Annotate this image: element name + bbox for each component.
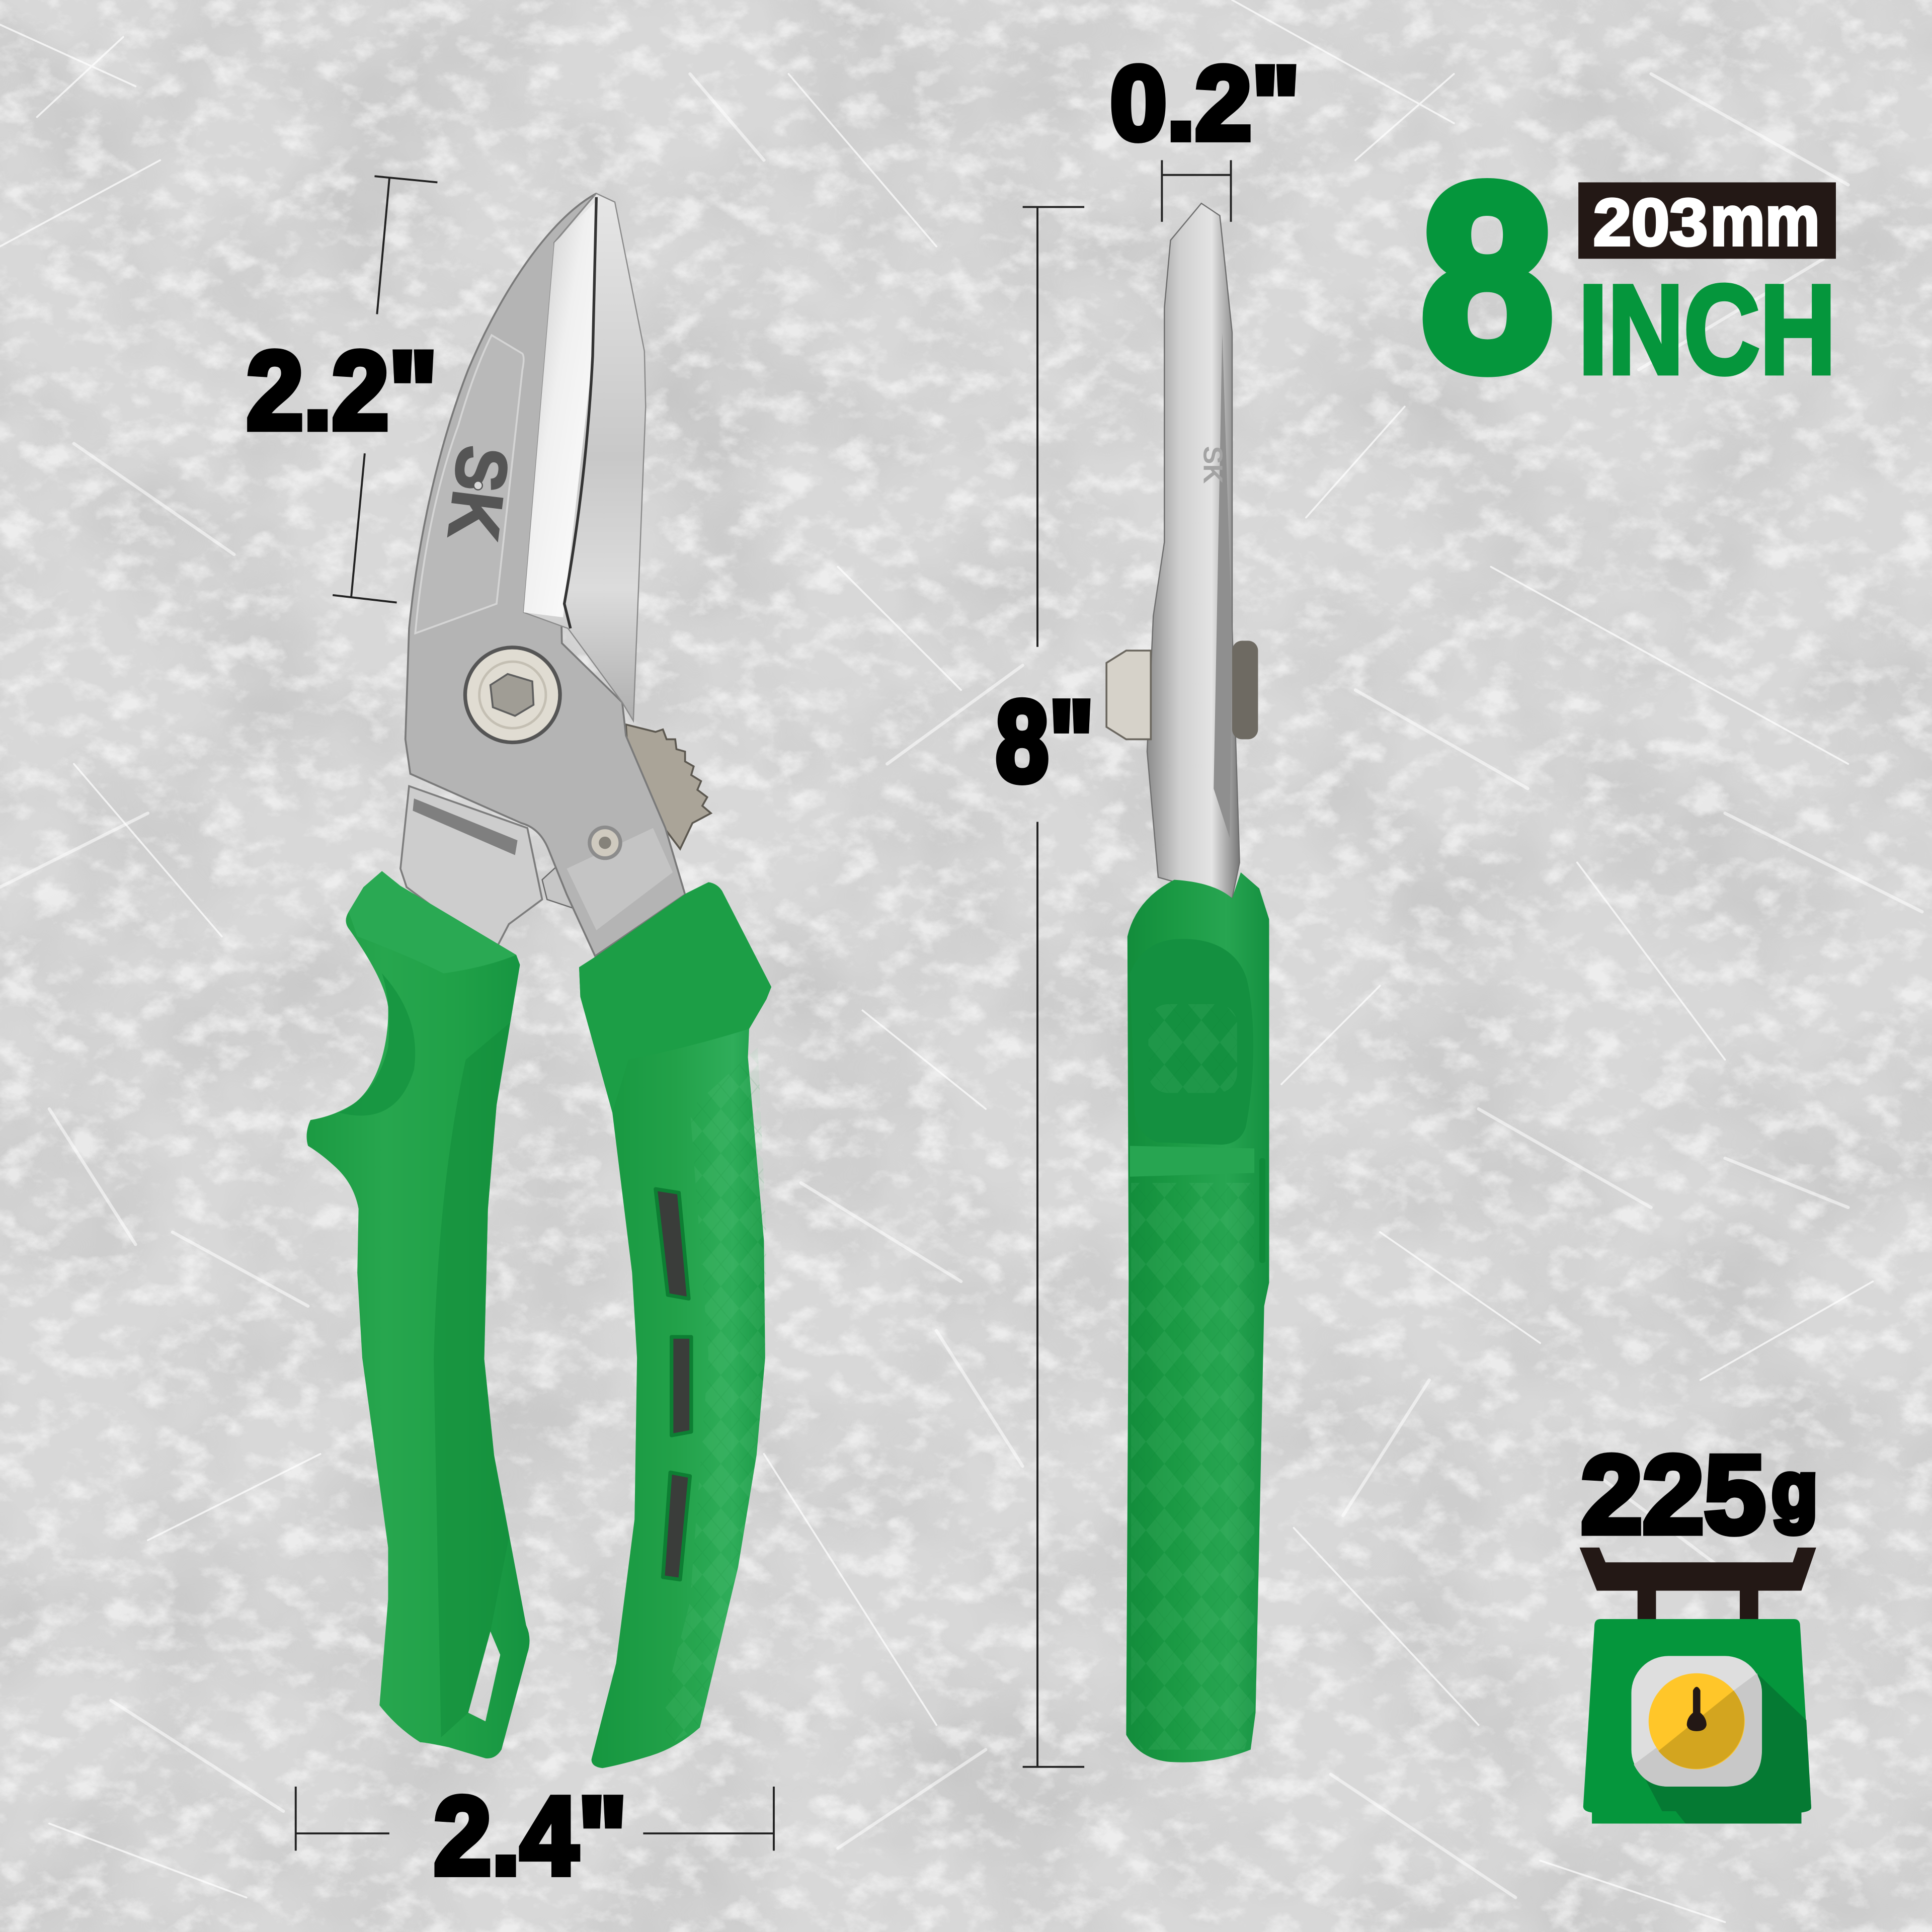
right handle <box>579 882 776 1775</box>
dimension: overall length 8 in <box>996 207 1094 1767</box>
pivot link <box>542 866 577 909</box>
lower jaw metal <box>400 786 542 952</box>
weight: 225g: 225 <box>1581 1432 1765 1557</box>
dimension: handle width 2.4 in <box>296 1774 774 1898</box>
grip slots <box>656 1189 691 1580</box>
light top collar <box>349 871 516 974</box>
left handle with finger hook <box>306 871 530 1758</box>
dial needle <box>1687 1687 1707 1731</box>
dimension: blade thickness 0.2 in <box>1110 45 1300 222</box>
weight: 225g: g <box>1772 1446 1817 1534</box>
size badge: 8 inch / 203mm <box>1421 130 1836 425</box>
metal highlight band <box>567 828 673 930</box>
blade edge line <box>565 197 596 628</box>
large numeral: 8 <box>1421 130 1554 425</box>
diamond grip texture <box>1131 1183 1254 1750</box>
recessed logo panel <box>415 335 524 633</box>
brand logo: SK <box>433 442 524 544</box>
millimetre label: mm <box>1710 181 1820 261</box>
scale pan <box>1580 1548 1816 1619</box>
inch label: INCH <box>1578 259 1836 400</box>
grip texture <box>666 1048 766 1741</box>
side logo: SK <box>1198 446 1228 484</box>
dimension: blade length 2.2 in: 2.2" <box>247 328 437 452</box>
dimension: handle width 2.4 in: 2.4" <box>434 1774 627 1898</box>
seam slot <box>1259 1158 1265 1263</box>
millimetre label <box>1578 181 1836 261</box>
long shadow <box>1638 1673 1811 1823</box>
pivot bolt <box>463 646 562 744</box>
polished bevel <box>524 201 596 617</box>
gear ratchet <box>626 725 711 849</box>
dial face <box>1649 1673 1745 1769</box>
dial plate <box>1631 1656 1762 1787</box>
thumb rest <box>1130 939 1253 1145</box>
cup shading <box>339 974 415 1115</box>
pliers: front view <box>306 193 776 1775</box>
icon: kitchen scale <box>1580 1548 1816 1823</box>
side blade <box>1147 203 1240 898</box>
pliers: side view <box>1106 203 1269 1762</box>
millimetre label: 203 <box>1593 185 1708 260</box>
scale body <box>1583 1619 1811 1823</box>
lock screw <box>588 826 622 860</box>
darker inner strip <box>434 1023 510 1737</box>
cutting blade <box>524 193 646 721</box>
nut <box>1106 640 1258 739</box>
dimension: overall length 8 in: 8" <box>996 677 1094 806</box>
side handle <box>1126 872 1269 1762</box>
upper jaw and handle metal <box>406 193 685 956</box>
dimension: blade thickness 0.2 in: 0.2" <box>1110 45 1300 162</box>
light band <box>1130 1146 1254 1177</box>
dimension: blade length 2.2 in <box>247 176 437 603</box>
